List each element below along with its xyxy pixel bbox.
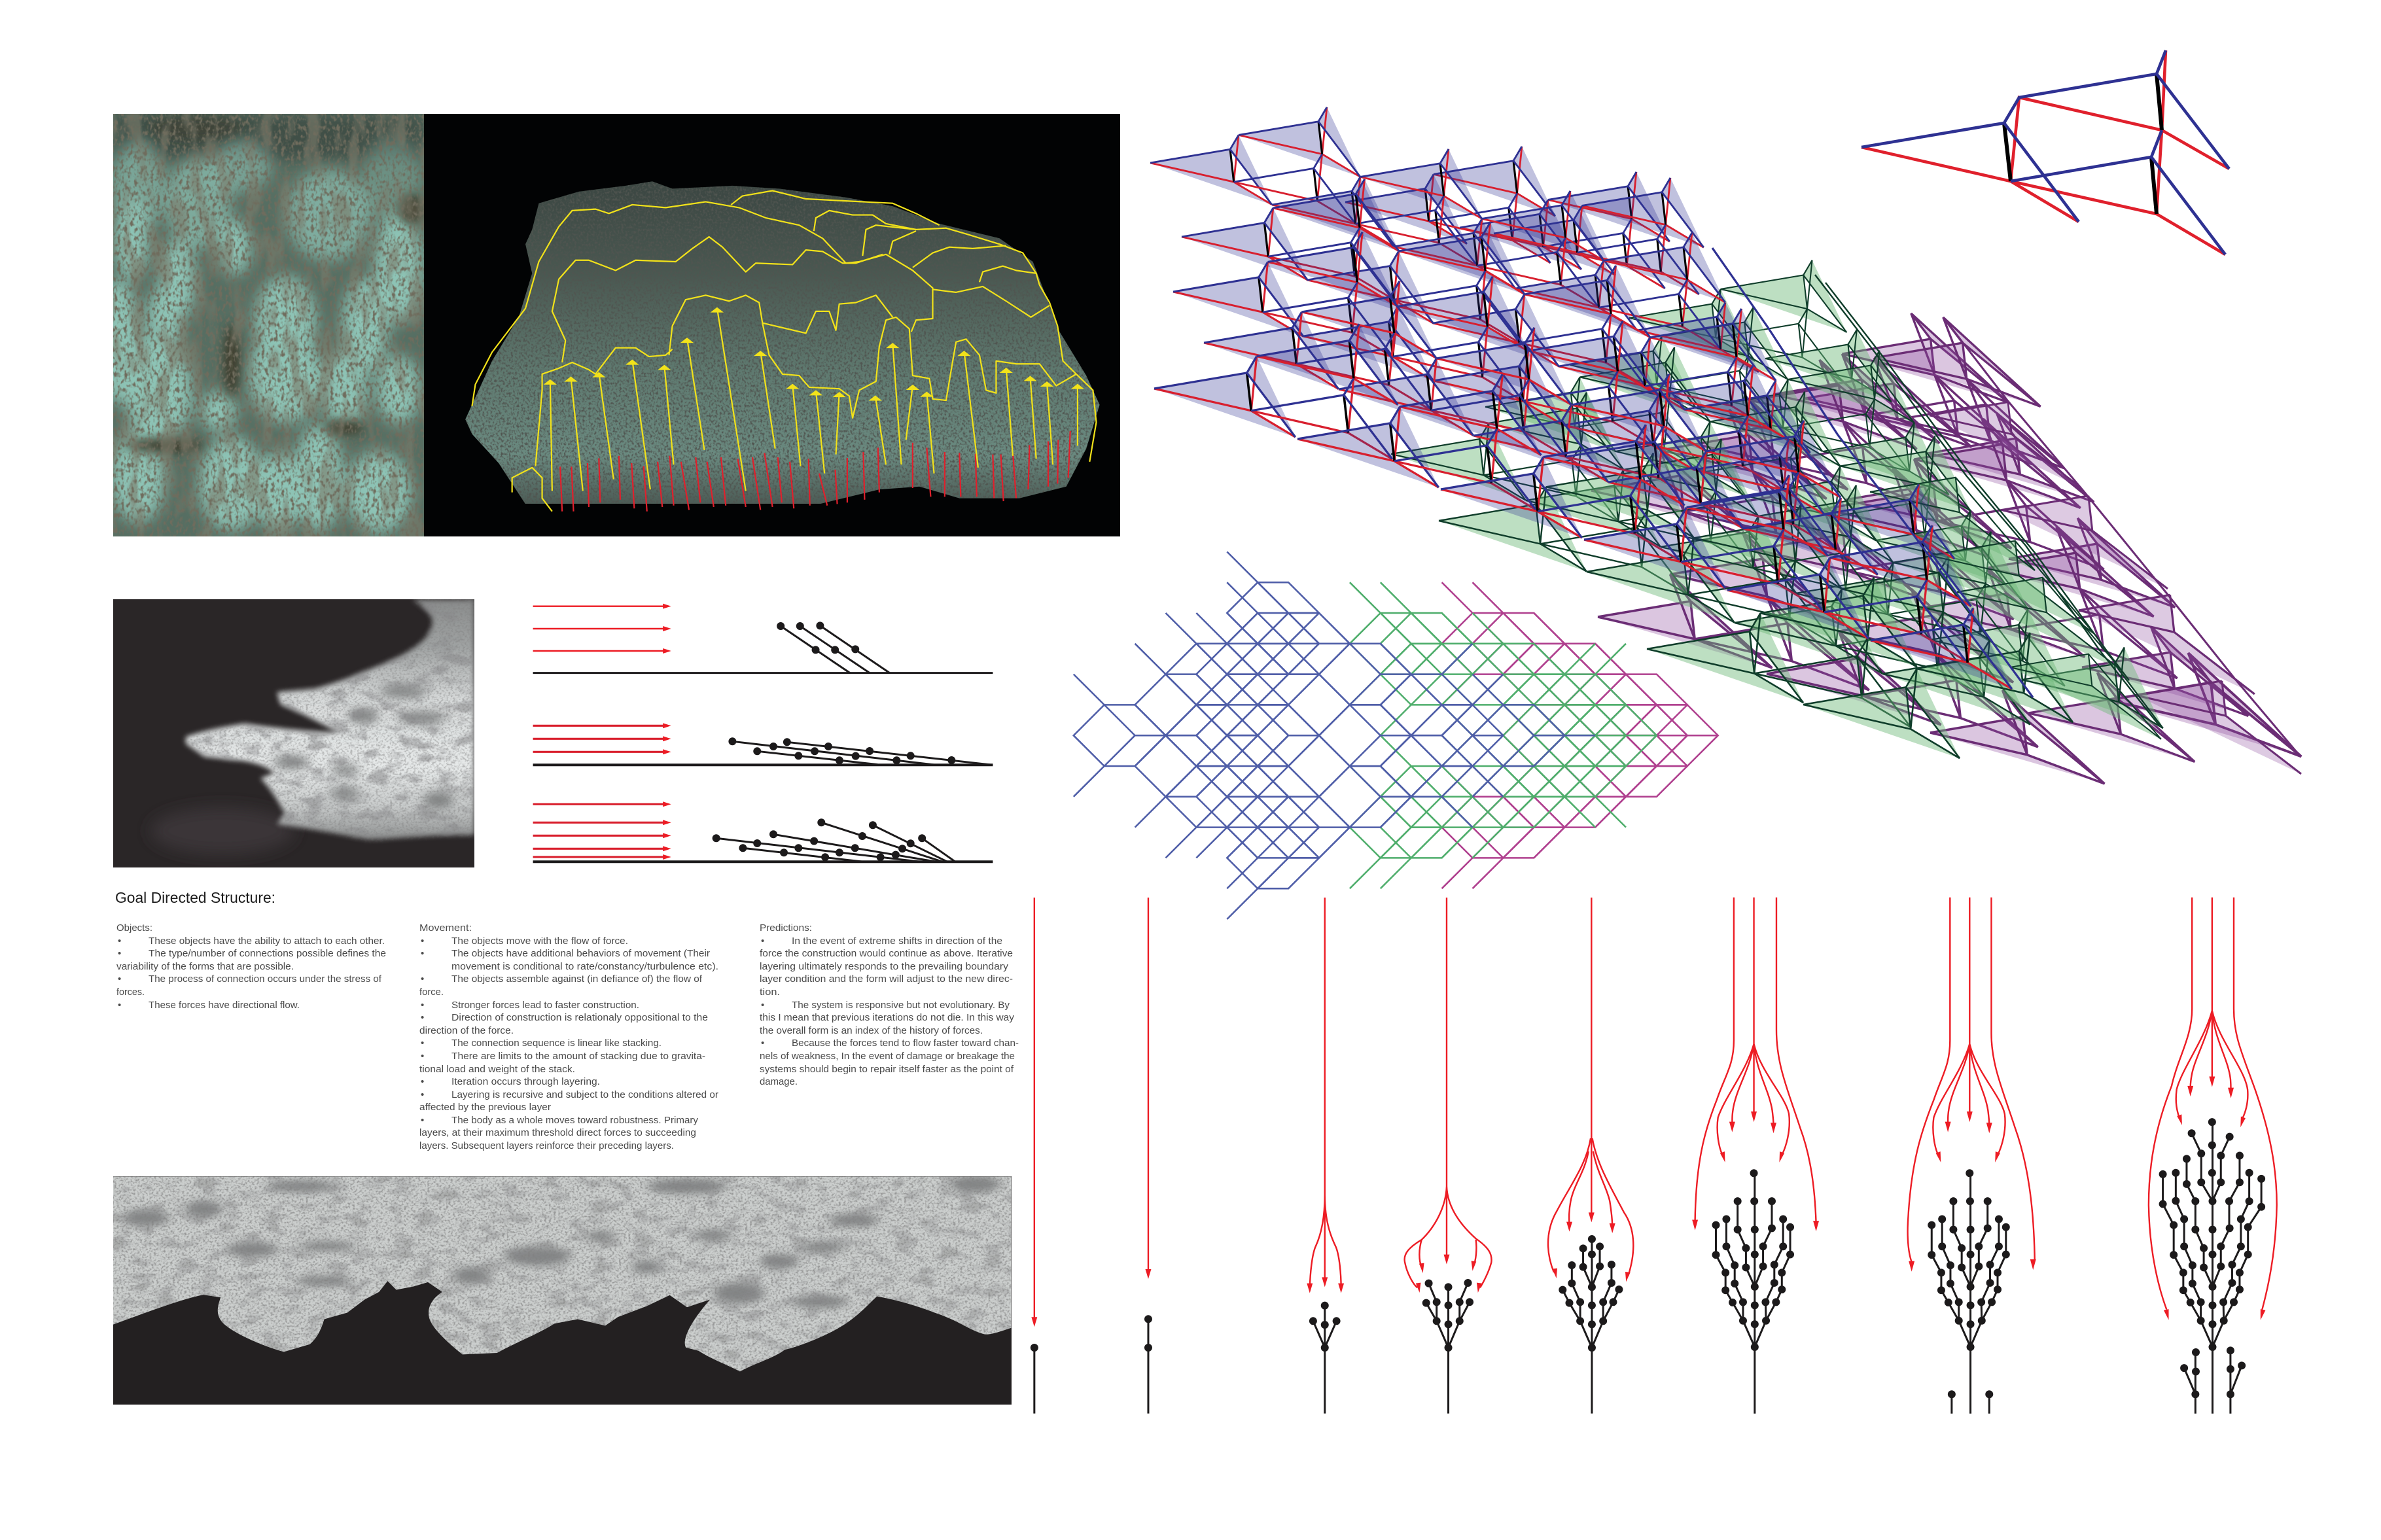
diagram: low force, steep stacks (533, 604, 993, 673)
force flow diagrams, stages 1 to 5 (1031, 898, 1633, 1414)
force and stacking diagrams (533, 604, 993, 862)
text column: movement: • (421, 1012, 424, 1023)
3D lattice: purple back layer (1591, 313, 2301, 784)
text column: predictions: damage. (760, 1076, 798, 1087)
text column: predictions: layering ultimately responds to the prevailing boundary (760, 961, 1009, 972)
text column: objects: variability of the forms that are possible. (116, 961, 294, 972)
text column: movement: layers. Subsequent layers reinforce their preceding layers. (419, 1140, 674, 1151)
text column: movement: • (421, 1089, 424, 1100)
text column: predictions: layer condition and the form will adjust to the new direc- (760, 973, 1013, 985)
text column: predictions: tion. (760, 987, 780, 998)
text column: movement: • (421, 1115, 424, 1126)
text column: movement: direction of the force. (419, 1025, 514, 1036)
text column: movement: • (421, 1000, 424, 1011)
text column: movement: layers, at their maximum threshold direct forces to succeeding (419, 1127, 696, 1138)
title: Goal Directed Structure: (115, 889, 275, 906)
crystal mass with shadow pockets (113, 1176, 1012, 1371)
green modules along the sweep edge (1870, 478, 2161, 739)
crystal mass (186, 600, 474, 839)
text column: predictions: The system is responsive but not evolutionary. By (792, 1000, 1010, 1011)
text column: movement: • (421, 1076, 424, 1087)
plan view hexagonal lattice (1074, 551, 1718, 919)
text column: movement: • (421, 1038, 424, 1049)
text column: movement: • (421, 973, 424, 985)
text column: movement: There are limits to the amount of stacking due to gravita- (451, 1051, 705, 1062)
text column: predictions: • (761, 1038, 764, 1049)
shadow pockets and grain (188, 599, 474, 840)
stage 6: split flow around tree (1692, 898, 1819, 1414)
stage 1: single node (1031, 898, 1037, 1414)
text column: movement: The connection sequence is linear like stacking. (451, 1038, 661, 1049)
text column: movement: The body as a whole moves toward robustness. Primary (451, 1115, 699, 1126)
text column: movement: Stronger forces lead to faster construction. (451, 1000, 639, 1011)
text column: predictions: • (761, 1000, 764, 1011)
text column: objects: These objects have the ability to attach to each other. (149, 936, 385, 947)
stage 5: third branching (1548, 898, 1633, 1414)
photo: teal coral close-up (97, 114, 425, 536)
text column: objects: • (118, 948, 121, 959)
photo: wide grey crystal edge on black (113, 1176, 1012, 1405)
text column: movement: • (421, 936, 424, 947)
text column: objects: The process of connection occurs under the stress of (149, 973, 382, 985)
text column: objects: • (118, 1000, 121, 1011)
text column: predictions: nels of weakness, In the event of damage or breakage the (760, 1051, 1015, 1062)
text column: predictions: the overall form is an index of the history of forces. (760, 1025, 983, 1036)
blue sweep edge (1712, 248, 2033, 697)
text column: movement: Iteration occurs through layering. (451, 1076, 600, 1087)
purple sweep edge (1943, 317, 2299, 754)
photo: grey crystal growth on dark ground (113, 599, 474, 867)
yellow growth contours (472, 191, 1096, 512)
green sweep edge (1815, 275, 2159, 726)
magenta plan layer (1442, 582, 1718, 888)
yellow growth arrows (550, 308, 1078, 491)
text column: predictions (760, 922, 1019, 1087)
text column: movement: Direction of construction is relationaly oppositional to the (451, 1012, 708, 1023)
3D lattice: green middle layer (1391, 260, 2163, 758)
stage 3: first branching (1307, 898, 1344, 1414)
text column: predictions: • (761, 936, 764, 947)
text column: predictions: Predictions: (760, 922, 812, 934)
text column: objects: • (118, 973, 121, 985)
diagram: strong force, flat stacks (533, 723, 993, 765)
text column: movement: affected by the previous layer (419, 1102, 551, 1113)
text column: movement: • (421, 1051, 424, 1062)
3D lattice: blue and red front layer (1150, 107, 2033, 697)
photo: black panel with traced coral growth (424, 114, 1120, 536)
text column: objects: forces. (116, 987, 145, 998)
text column: objects: Objects: (116, 922, 152, 934)
text column: movement: Movement: (419, 922, 472, 934)
blue plan layer (1074, 551, 1595, 919)
green plan layer (1350, 582, 1657, 888)
text column: predictions: force the construction would continue as above. Iterative (760, 948, 1013, 959)
stage 8: full tree with base branches (2149, 898, 2277, 1414)
text column: movement: force. (419, 987, 444, 998)
text column: movement: movement is conditional to rate/constancy/turbulence etc). (451, 961, 718, 972)
text column: movement: tional load and weight of the stack. (419, 1064, 575, 1075)
text column: predictions: Because the forces tend to flow faster toward chan- (792, 1038, 1019, 1049)
text column: movement: • (421, 948, 424, 959)
stage 4: second branching (1405, 898, 1492, 1414)
diagram: mixed force, fanned stacks (533, 801, 993, 862)
force flow diagrams, stages 6 to 8 (1692, 898, 2277, 1414)
text column: movement: The objects assemble against (in defiance of) the flow of (451, 973, 703, 985)
text column: objects: The type/number of connections possible defines the (149, 948, 386, 959)
coral silhouette (451, 177, 1119, 504)
text column: predictions: In the event of extreme shifts in direction of the (792, 936, 1002, 947)
text column: objects (116, 922, 386, 1011)
text column: objects: These forces have directional flow. (149, 1000, 300, 1011)
blurred ground texture (150, 807, 294, 854)
text column: movement (419, 922, 718, 1151)
stage 7: tree with new base sprouts (1908, 898, 2036, 1414)
text column: movement: The objects move with the flow of force. (451, 936, 628, 947)
text column: objects: • (118, 936, 121, 947)
text column: movement: Layering is recursive and subject to the conditions altered or (451, 1089, 718, 1100)
stage 2: two nodes (1145, 898, 1151, 1414)
red base marks (560, 431, 1070, 512)
text column: predictions: systems should begin to repair itself faster as the point of (760, 1064, 1014, 1075)
text column: predictions: this I mean that previous iterations do not die. In this way (760, 1012, 1015, 1023)
text column: movement: The objects have additional behaviors of movement (Their (451, 948, 710, 959)
single lattice module, top right (1861, 50, 2229, 254)
purple modules along the sweep edge (1930, 402, 2301, 774)
